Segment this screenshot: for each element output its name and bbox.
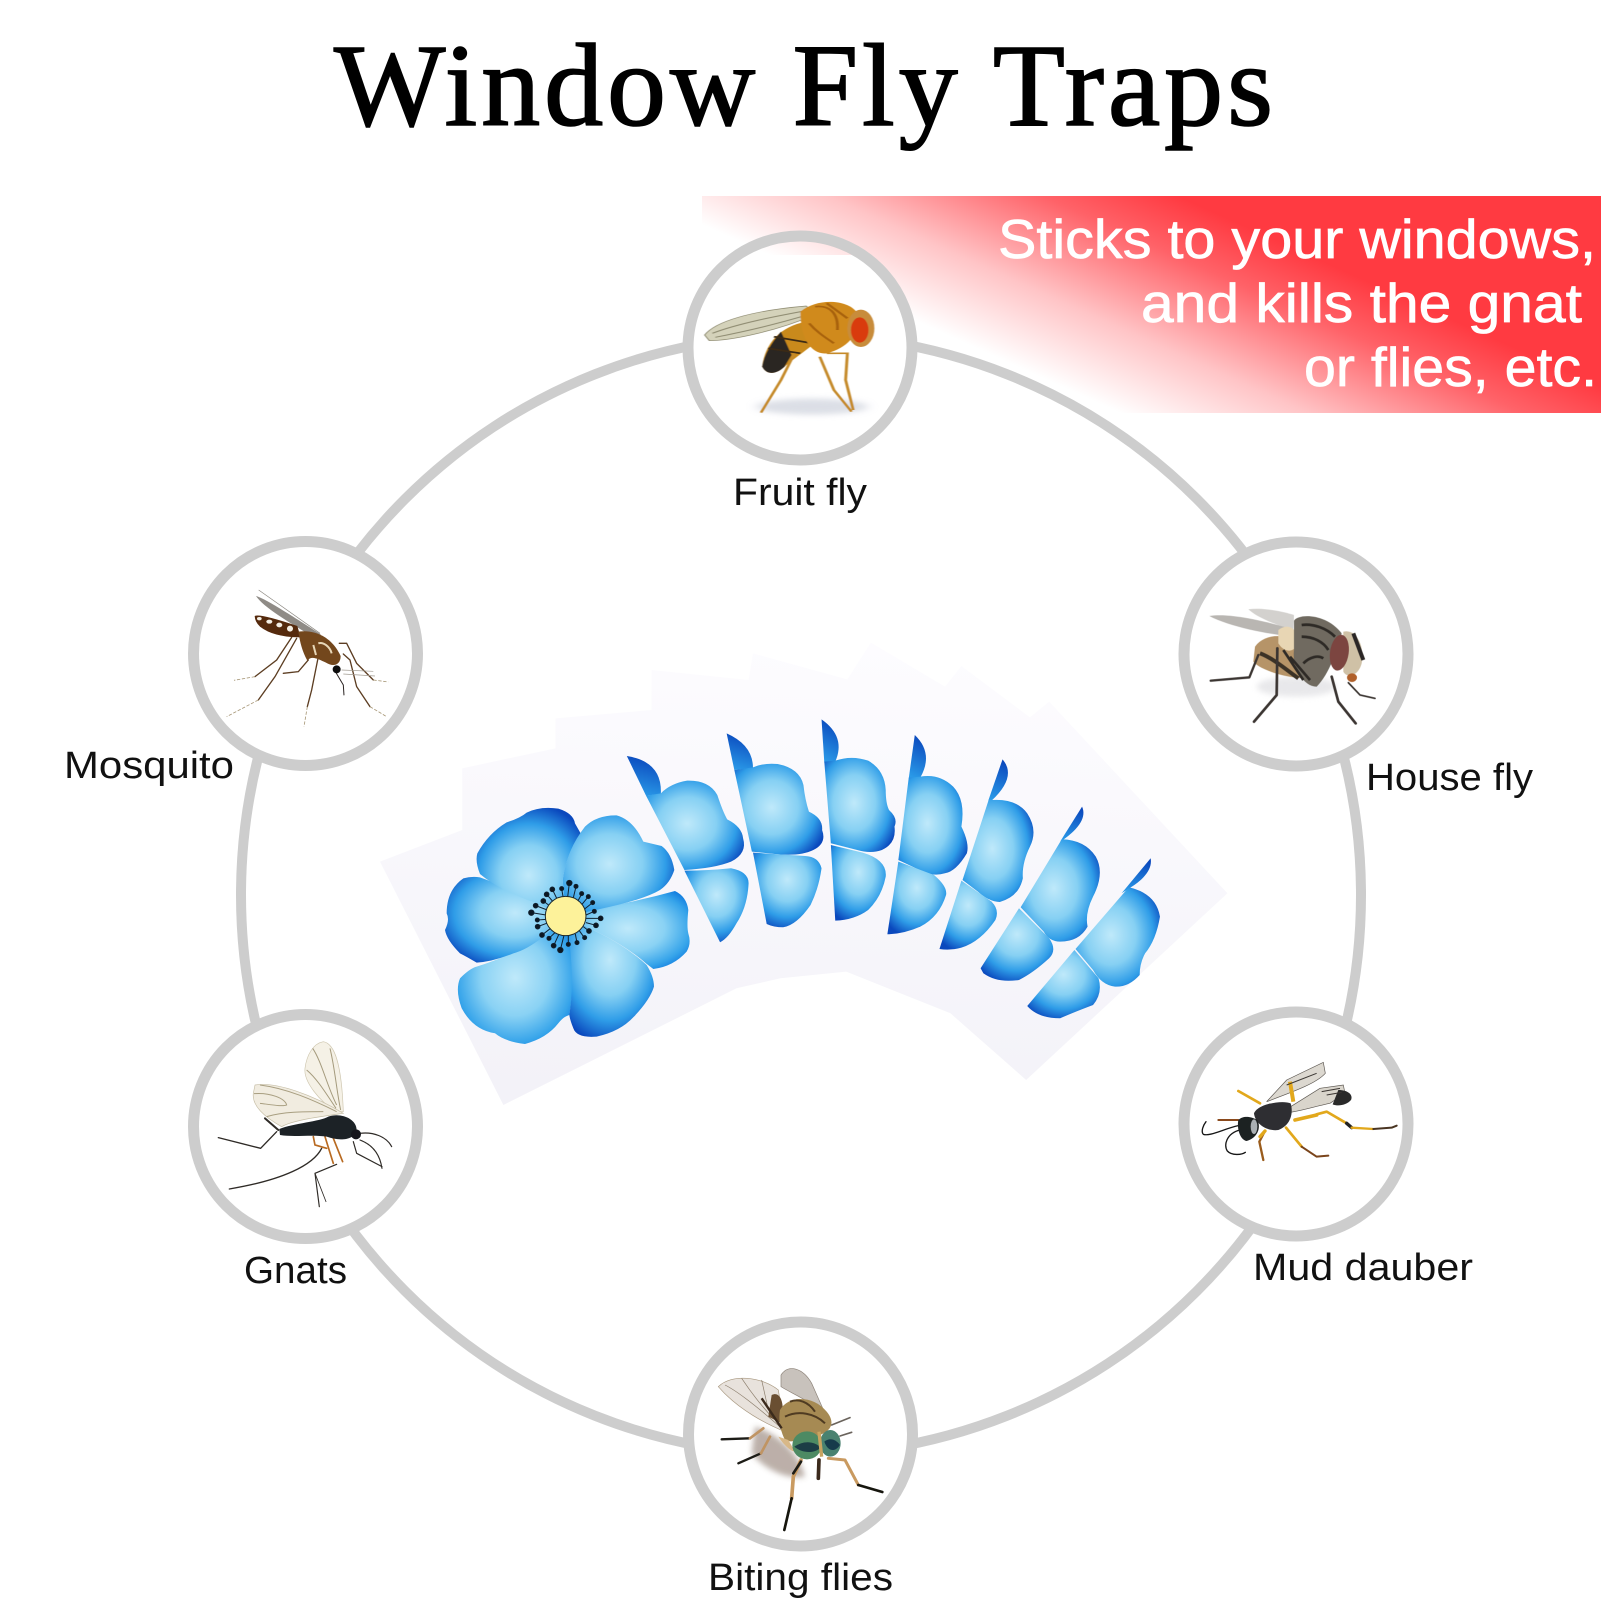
banner text: and kills the gnat xyxy=(1141,272,1582,334)
label: mud dauber: Mud dauber xyxy=(1253,1247,1473,1289)
label: biting flies: Biting flies xyxy=(708,1557,893,1599)
sticker sheets xyxy=(380,643,1227,1105)
label: gnats: Gnats xyxy=(244,1250,347,1292)
segment 5 xyxy=(939,759,1033,950)
petal: right xyxy=(566,891,690,969)
segment 3 xyxy=(822,719,896,921)
whole flower xyxy=(445,808,690,1044)
icon: mosquito xyxy=(227,590,388,727)
banner text xyxy=(998,208,1597,398)
petal: lower left xyxy=(458,917,572,1044)
segment 6 xyxy=(981,807,1100,981)
icon: mud dauber xyxy=(1202,1062,1397,1160)
segment 2 xyxy=(727,733,823,927)
label: house fly: House fly xyxy=(1366,757,1533,799)
petal: top left xyxy=(477,808,581,917)
node: mud dauber xyxy=(1184,1012,1408,1236)
icon: biting fly xyxy=(718,1369,882,1530)
banner text: Sticks to your windows, xyxy=(998,208,1596,270)
connecting ring xyxy=(241,335,1361,1455)
node: mosquito xyxy=(194,542,418,766)
node: gnats xyxy=(194,1014,418,1238)
node: fruit fly xyxy=(688,236,912,465)
label: mosquito: Mosquito xyxy=(64,745,234,787)
product: fan of flower-shaped window traps xyxy=(380,643,1227,1105)
node: biting flies xyxy=(688,1322,912,1546)
petal: top right xyxy=(563,815,674,917)
stamens xyxy=(529,880,603,953)
red banner xyxy=(702,196,1601,413)
segment 4 xyxy=(887,735,968,934)
icon: house fly xyxy=(1209,609,1375,723)
petal: left xyxy=(445,877,566,963)
banner text: or flies, etc. xyxy=(1304,336,1597,398)
title: Window Fly Traps xyxy=(334,20,1273,151)
cut flower segments xyxy=(627,719,1160,1018)
segment 1 xyxy=(627,756,749,942)
flower centre xyxy=(545,896,586,936)
icon: fruit fly xyxy=(705,302,874,415)
petal: lower right xyxy=(566,917,654,1037)
node: house fly xyxy=(1184,542,1408,766)
segment 7 xyxy=(1027,858,1160,1018)
icon: gnat xyxy=(218,1042,392,1207)
label: fruit fly: Fruit fly xyxy=(733,472,867,514)
